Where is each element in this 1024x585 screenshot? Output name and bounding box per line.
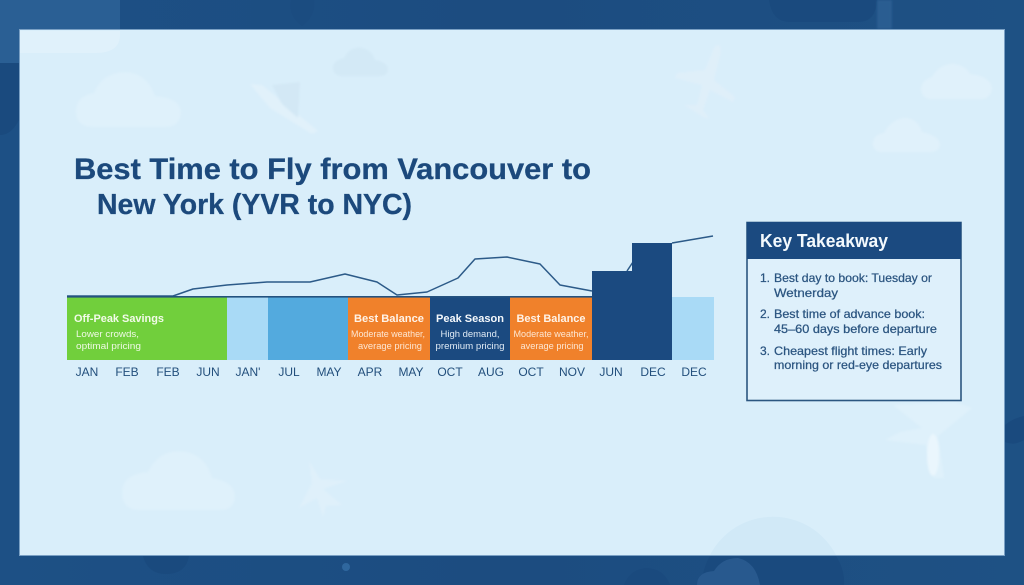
takeaway list: Best day to book: Tuesday or	[774, 271, 932, 285]
key takeaway heading: Key Takeakway	[760, 231, 888, 251]
background decoration: top glow	[877, 0, 892, 29]
month axis labels: JUN	[196, 365, 220, 379]
background plane: upper right	[675, 45, 735, 118]
month axis labels: JAN'	[236, 365, 260, 379]
segment: peak season navy	[430, 297, 510, 360]
label: best balance first: average pricing	[358, 341, 422, 352]
month axis labels	[76, 365, 707, 379]
segment: best balance orange	[348, 297, 430, 360]
key takeaway box	[747, 222, 961, 400]
background cloud: right	[873, 118, 940, 152]
label: peak season: High demand,	[440, 329, 500, 340]
month axis labels: DEC	[681, 365, 707, 379]
title	[74, 153, 591, 221]
chart top rule	[67, 296, 592, 298]
segment: off-peak green	[67, 297, 227, 360]
background plane: upper left	[250, 84, 318, 134]
title: New York (YVR to NYC)	[97, 189, 412, 221]
label: best balance second: Best Balance	[516, 313, 586, 325]
background cloud: bottom left	[122, 451, 235, 510]
month axis labels: JUL	[278, 365, 300, 379]
month axis labels: APR	[358, 365, 383, 379]
background decoration: bottom cloud	[697, 558, 760, 585]
background decoration: right edge dark	[1005, 416, 1024, 444]
takeaway list: Best time of advance book:	[774, 307, 925, 321]
background decoration: bottom dot	[342, 563, 350, 571]
label: off-peak savings: Lower crowds,	[76, 329, 139, 340]
month axis labels: JAN	[76, 365, 98, 379]
takeaway list: 1.	[760, 271, 770, 285]
background plane: bottom	[299, 461, 347, 517]
background cloud: top left corner tint	[20, 31, 120, 53]
background cloud: upper right	[921, 64, 992, 99]
takeaway list: 45–60 days before departure	[774, 322, 937, 336]
label: off-peak savings: Off-Peak Savings	[74, 313, 164, 325]
background plane shadow: upper left	[272, 82, 300, 118]
label: best balance first: Best Balance	[354, 313, 424, 325]
segment: peak navy steps	[592, 243, 672, 360]
takeaway list: 3.	[760, 344, 770, 358]
month axis labels: MAY	[316, 365, 342, 379]
label: peak season: premium pricing	[436, 341, 504, 352]
background circle: bottom right	[710, 517, 836, 555]
month axis labels: OCT	[518, 365, 544, 379]
segment: best balance orange	[510, 297, 592, 360]
month axis labels: AUG	[478, 365, 504, 379]
takeaway list: morning or red-eye departures	[774, 358, 942, 372]
takeaway list: Cheapest flight times: Early	[774, 344, 927, 358]
background decoration: top dark pill	[769, 0, 877, 22]
month axis labels: DEC	[640, 365, 666, 379]
segment: mid blue	[268, 297, 348, 360]
background decoration: bottom dark circle	[624, 568, 670, 585]
background decoration: top left cloud blob	[0, 0, 120, 63]
segment: light blue end	[672, 297, 714, 360]
label: best balance first	[351, 313, 425, 352]
label: off-peak savings: optimal pricing	[76, 341, 141, 352]
month axis labels: FEB	[156, 365, 180, 379]
label: off-peak savings	[74, 313, 164, 352]
label: best balance first: Moderate weather,	[351, 329, 425, 340]
background cloud: top centre	[333, 48, 388, 76]
label: best balance second	[514, 313, 588, 352]
segment: light blue	[227, 297, 268, 360]
month axis labels: FEB	[115, 365, 139, 379]
background decoration: left dark circle	[0, 63, 20, 135]
background plane highlight: bottom right	[927, 434, 939, 476]
month axis labels: NOV	[559, 365, 585, 379]
price timeline chart	[67, 236, 714, 379]
takeaway list	[760, 271, 942, 372]
background cloud: upper left	[76, 72, 181, 127]
key takeaway header	[747, 222, 961, 259]
label: best balance second: Moderate weather,	[514, 329, 588, 340]
label: best balance second: average pricing	[520, 341, 584, 352]
background plane: bottom right	[885, 402, 972, 478]
takeaway list: 2.	[760, 307, 770, 321]
label: peak season	[436, 313, 504, 352]
label: peak season: Peak Season	[436, 313, 504, 325]
background decoration: top small circle	[290, 0, 314, 26]
background decoration: bottom right circle	[702, 556, 844, 585]
month axis labels: JUN	[599, 365, 623, 379]
title: Best Time to Fly from Vancouver to	[74, 153, 591, 186]
takeaway list: Wetnerday	[774, 286, 838, 300]
trend line	[67, 236, 713, 296]
month axis labels: MAY	[398, 365, 424, 379]
panel: key takeaway	[747, 222, 961, 400]
background decoration: bottom left semicircle	[143, 556, 189, 574]
month axis labels: OCT	[437, 365, 463, 379]
